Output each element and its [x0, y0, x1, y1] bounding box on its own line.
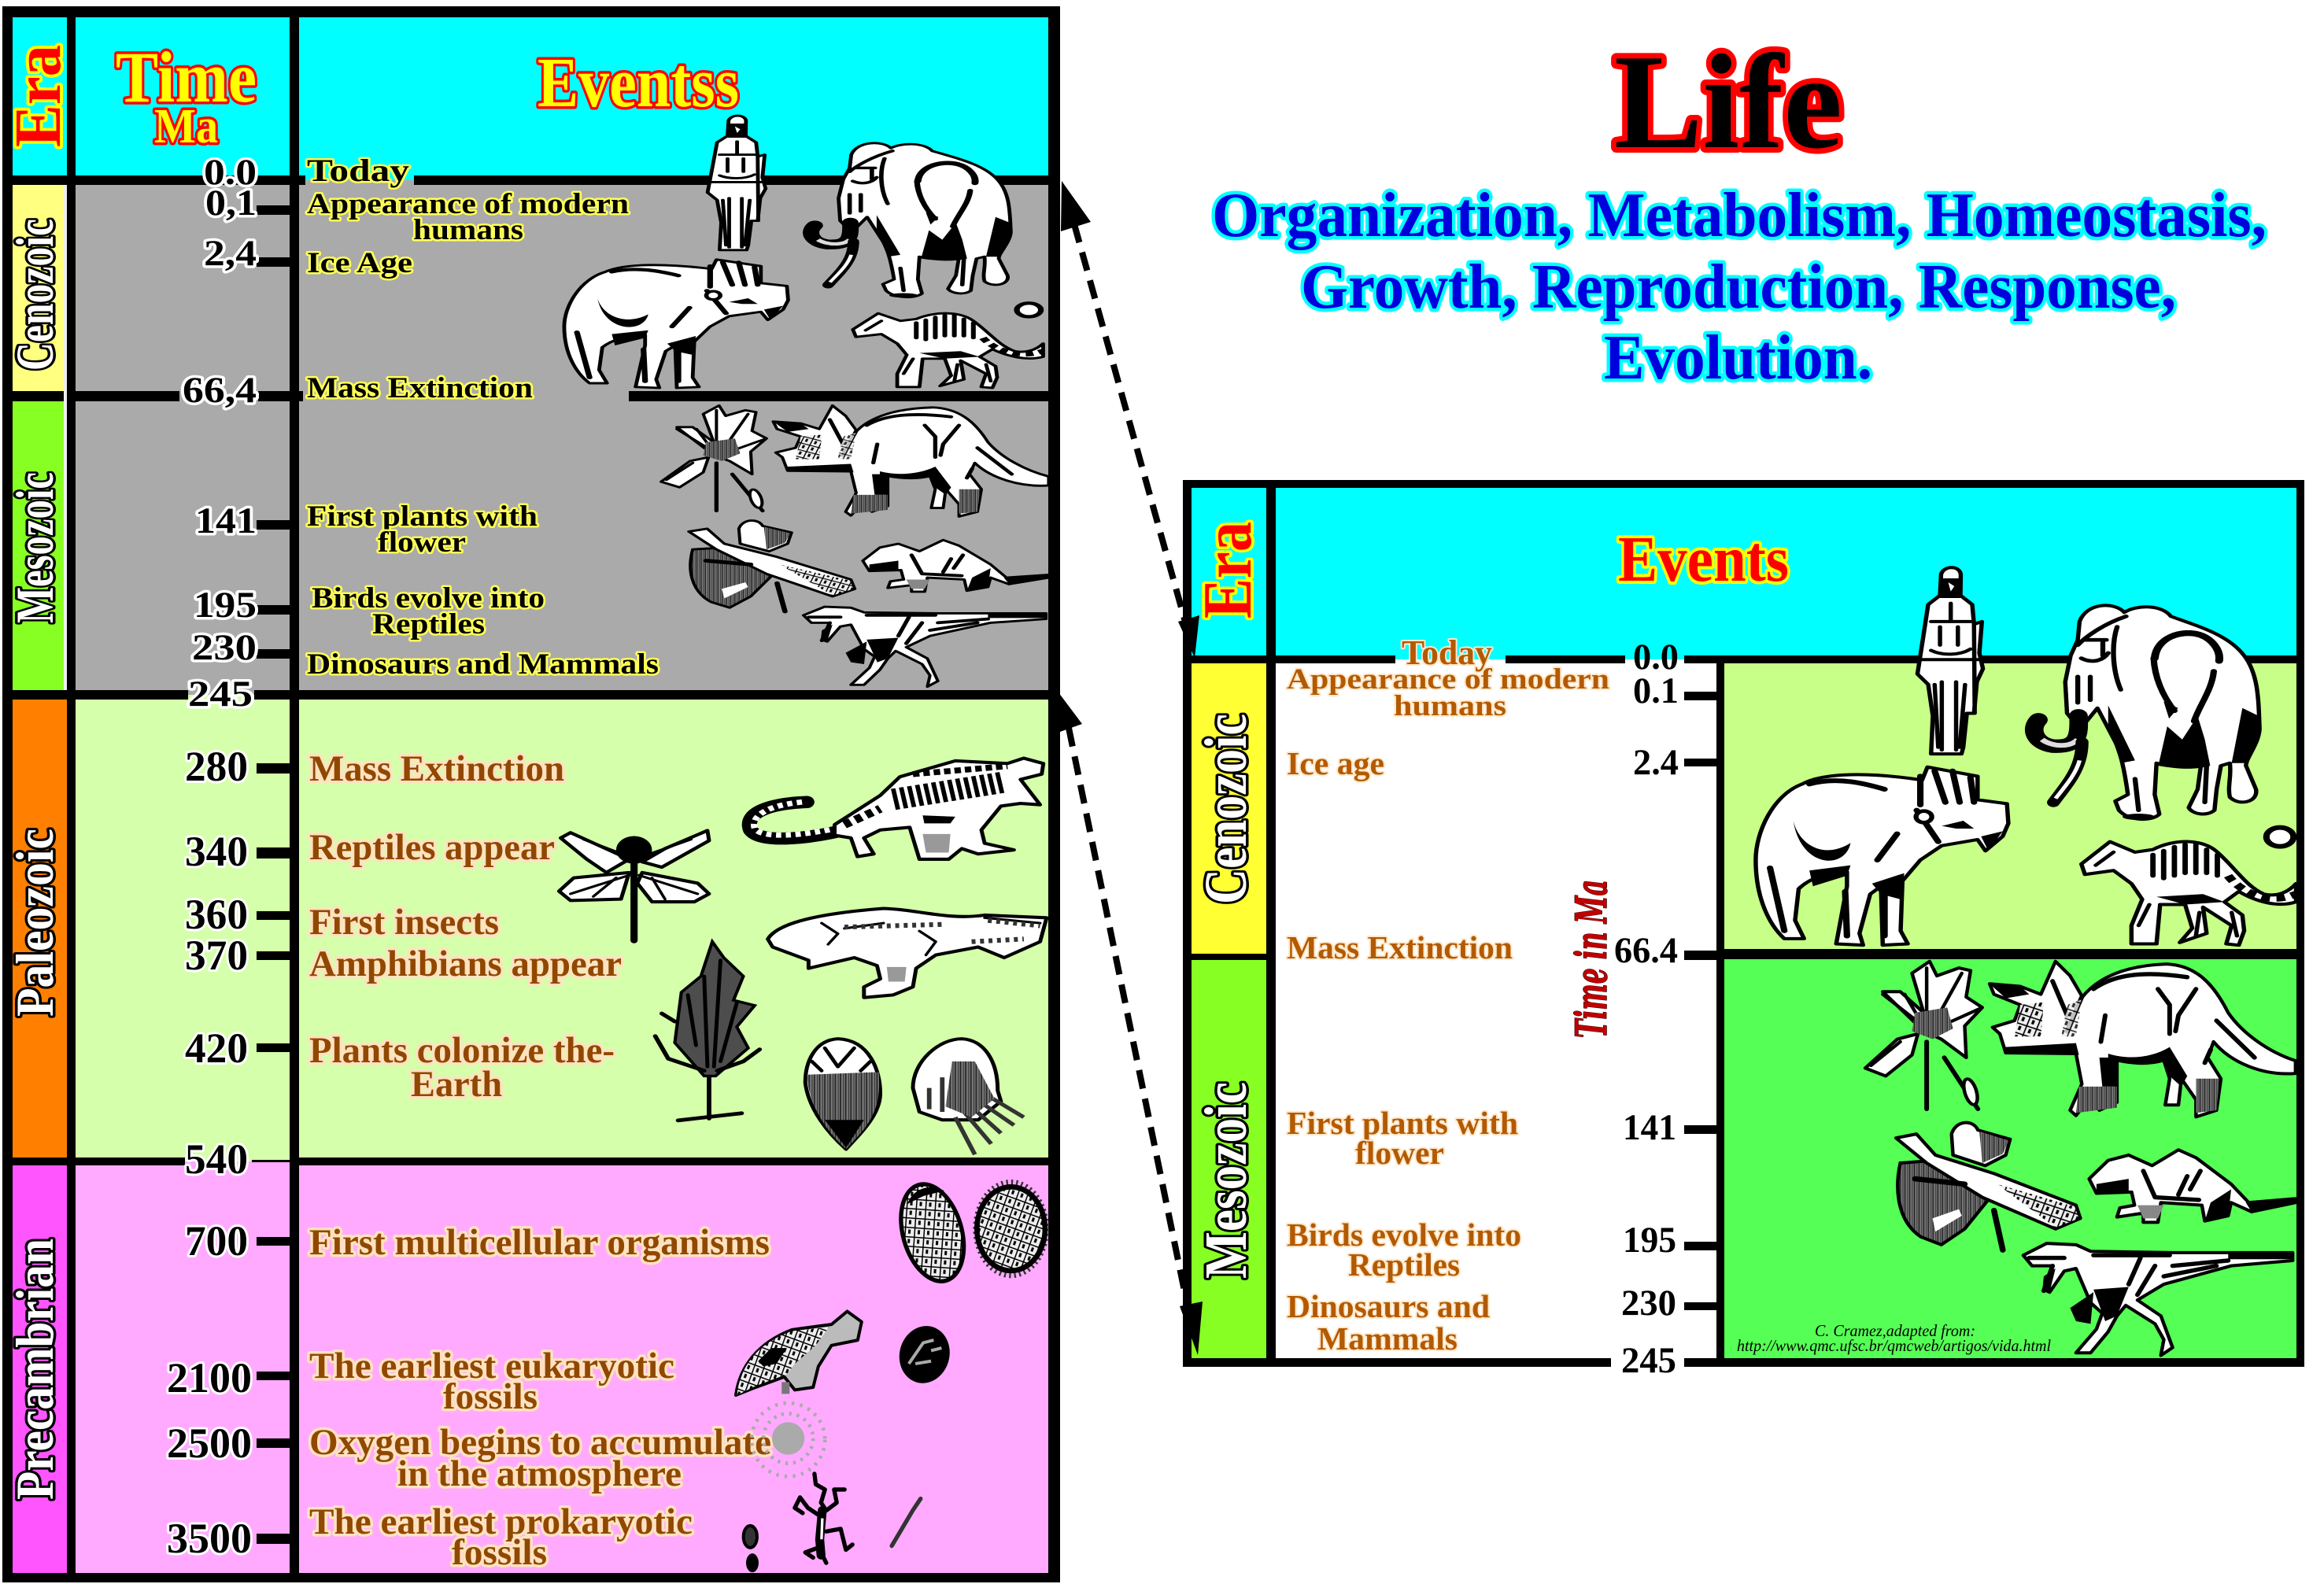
events text: Paleozoic: [309, 748, 622, 1105]
time column header: [76, 17, 290, 175]
time scale numbers: 230: [1621, 1283, 1676, 1324]
time scale numbers: 0,1: [205, 183, 257, 223]
icon: spiny round organism: [976, 1182, 1047, 1276]
events text: Precambrian: The earliest eukaryotic: [309, 1346, 674, 1386]
icon: archaeopteryx: [1896, 1123, 2080, 1250]
events text: Today: [1402, 633, 1492, 672]
Cenozoic events band: [299, 185, 1048, 391]
time scale numbers: 360: [185, 891, 248, 938]
label: Cenozoic: Cenozoic: [5, 219, 65, 371]
Precambrian era cell: [13, 1165, 67, 1573]
events text: [1287, 633, 1609, 1357]
events text: Cenozoic and Mesozoic: Today: [307, 153, 409, 188]
icon: archaeopteryx: [689, 521, 855, 611]
time scale numbers: 700: [185, 1217, 248, 1265]
animals: Cenozoic: [1756, 567, 2296, 945]
time scale numbers: 245: [1621, 1340, 1676, 1381]
icon: triceratops: [1990, 962, 2296, 1117]
time scale numbers: 0.0: [204, 152, 257, 193]
events text: Precambrian: The earliest prokaryotic: [309, 1501, 693, 1542]
time ticks: [257, 205, 290, 1544]
label: Precambrian: Precambrian: [5, 1239, 65, 1500]
time scale numbers: 141: [1623, 1107, 1676, 1148]
events text: Precambrian: fossils: [443, 1376, 538, 1417]
icon: oxygen dot cloud: [752, 1403, 825, 1476]
icon: flowering plant: [661, 405, 767, 511]
time scale numbers: 370: [185, 932, 248, 979]
time scale numbers: 245: [188, 674, 253, 714]
time scale numbers: 3500: [167, 1515, 252, 1562]
time scale numbers: 280: [185, 743, 248, 790]
time scale numbers: 420: [185, 1025, 248, 1072]
Mesozoic illustration band: [1724, 959, 2296, 1358]
icon: small mammal: [2089, 1150, 2296, 1222]
events text: Paleozoic: First insects: [309, 902, 499, 943]
animals: Mesozoic: [1865, 962, 2296, 1356]
icon: mammoth: [811, 143, 1011, 297]
time scale numbers: 66,4: [183, 370, 257, 411]
events text: Birds evolve into: [1287, 1217, 1521, 1253]
source credit: C. Cramez,adapted from:: [1815, 1321, 1975, 1340]
events text: Dinosaurs and: [1287, 1288, 1490, 1324]
events text: humans: [1394, 690, 1506, 722]
events text: First plants with: [1287, 1105, 1518, 1141]
era column header: [13, 17, 67, 175]
events text: Precambrian: fossils: [452, 1532, 547, 1573]
animals: Cenozoic: [564, 116, 1043, 388]
source credit: http://www.qmc.ufsc.br/qmcweb/artigos/vida.html: [1737, 1336, 2051, 1355]
Paleozoic time band: [76, 700, 290, 1158]
events text: Reptiles: [1348, 1246, 1460, 1283]
events text: Appearance of modern: [1287, 663, 1609, 696]
Cenozoic time band: [76, 185, 290, 391]
icon: mammoth: [2034, 605, 2259, 820]
events header: [1276, 488, 2296, 655]
icon: plant tree: [656, 942, 759, 1121]
label: Era: Era: [2, 45, 75, 147]
events text: Cenozoic and Mesozoic: Reptiles: [372, 608, 485, 641]
events text: Cenozoic and Mesozoic: First plants with: [307, 500, 538, 533]
panel: Cenozoic and Mesozoic detail: [1183, 480, 2304, 1381]
events text: Mass Extinction: [1287, 929, 1513, 966]
Mesozoic era cell: [1192, 960, 1266, 1358]
events text: Paleozoic: Earth: [411, 1064, 502, 1105]
events text: Precambrian: in the atmosphere: [397, 1453, 682, 1494]
icon: small mammal: [863, 540, 1048, 592]
source credit: [1737, 1321, 2051, 1355]
time scale numbers: 141: [195, 500, 257, 541]
events text: flower: [1355, 1135, 1444, 1171]
time scale numbers: 2,4: [204, 233, 257, 274]
events text: Mammals: [1317, 1320, 1458, 1357]
Mesozoic era cell: [13, 401, 64, 690]
Mesozoic events band: [299, 401, 1048, 690]
time scale numbers: 2500: [167, 1420, 252, 1467]
icon: striped mammal: [853, 303, 1043, 388]
events column header: [299, 17, 1048, 175]
era labels: [2, 45, 75, 1500]
icon: small coccus pair: [744, 1526, 759, 1572]
title: Life: Life: [1614, 28, 1842, 177]
events text: Cenozoic and Mesozoic: flower: [378, 526, 466, 559]
subtitle: characteristics of life: [1212, 181, 2267, 393]
time ticks: [1684, 655, 1716, 1310]
icon: dark round cell: [893, 1320, 956, 1389]
time scale numbers: 340: [185, 828, 248, 875]
icon: human: [1917, 567, 1985, 754]
events text: Paleozoic: Plants colonize the-: [309, 1030, 615, 1071]
subtitle: characteristics of life: Organization, Metabolism, Homeostasis,: [1212, 181, 2267, 250]
label: Cenozoic: Cenozoic: [1193, 714, 1259, 904]
subtitle: characteristics of life: Growth, Reproduction, Response,: [1301, 253, 2176, 322]
icon: horned mammal: [564, 260, 788, 388]
time scale numbers: 2100: [167, 1354, 252, 1401]
icon: jellyfish: [913, 1039, 1024, 1154]
icon: raptor: [804, 607, 1046, 687]
icon: flowering plant: [1865, 962, 1982, 1109]
events text: Cenozoic and Mesozoic: Dinosaurs and Mammals: [307, 648, 659, 681]
icon: human: [708, 116, 767, 250]
icon: raptor: [2023, 1243, 2293, 1356]
icon: striped mammal: [2082, 828, 2296, 945]
icon: triceratops: [773, 405, 1048, 516]
Precambrian events band: [299, 1165, 1048, 1573]
heading: Time Ma: Ma: [154, 100, 218, 153]
events white column: [1276, 663, 1716, 1358]
heading: Time Ma: Time: [116, 37, 257, 117]
organisms: Precambrian: [736, 1176, 1047, 1572]
events text: Cenozoic and Mesozoic: [307, 153, 659, 681]
events text: Cenozoic and Mesozoic: Appearance of modern: [307, 188, 629, 220]
era header: [1192, 488, 1266, 655]
label: Mesozoic: Mesozoic: [5, 472, 65, 623]
icon: trilobite: [805, 1039, 881, 1149]
events text: Cenozoic and Mesozoic: humans: [413, 214, 523, 246]
organisms: Paleozoic: [559, 759, 1047, 1154]
time scale numbers: 0.1: [1633, 670, 1679, 711]
animals: Mesozoic: [661, 405, 1048, 687]
Cenozoic era cell: [1192, 663, 1266, 954]
events text: Precambrian: Oxygen begins to accumulate: [309, 1422, 771, 1463]
events text: Paleozoic: Mass Extinction: [309, 748, 564, 789]
icon: oval multicellular organism: [890, 1176, 974, 1289]
events text: Paleozoic: Reptiles appear: [309, 827, 555, 868]
time scale numbers: [1614, 637, 1679, 1381]
time scale numbers: 540: [185, 1135, 248, 1183]
Paleozoic era cell: [13, 700, 67, 1158]
time scale numbers: 195: [1623, 1220, 1676, 1261]
heading: Events: Events: [1618, 522, 1789, 595]
Paleozoic events band: [299, 700, 1048, 1158]
time scale numbers: 195: [194, 585, 257, 626]
events text: Cenozoic and Mesozoic: Mass Extinction: [307, 372, 533, 404]
events text: Cenozoic and Mesozoic: Birds evolve into: [312, 582, 545, 615]
events text: Paleozoic: Amphibians appear: [309, 943, 622, 984]
icon: amphibian: [768, 908, 1047, 998]
icon: dragonfly: [559, 830, 709, 940]
arrow: Cenozoic link between panels: [1061, 181, 1199, 658]
label: Mesozoic: Mesozoic: [1193, 1082, 1259, 1279]
label: Paleozoic: Paleozoic: [5, 829, 65, 1017]
icon: prokaryote filament: [795, 1474, 852, 1563]
heading: Era: Era: [1190, 522, 1266, 618]
heading: Eventss: Eventss: [538, 44, 739, 122]
Mesozoic time band: [76, 401, 290, 690]
events text: Cenozoic and Mesozoic: Ice Age: [307, 247, 412, 279]
time scale numbers: 2.4: [1633, 742, 1679, 783]
time scale numbers: 0.0: [1633, 637, 1679, 678]
Cenozoic illustration band: [1724, 663, 2296, 949]
events text: Ice age: [1287, 745, 1384, 781]
time scale numbers: 230: [192, 627, 257, 668]
heading: Time Ma: [116, 37, 257, 153]
time scale numbers: 66.4: [1614, 930, 1678, 971]
axis label: Time in Ma: Time in Ma: [1566, 880, 1616, 1038]
icon: horned mammal: [1756, 767, 2008, 945]
icon: eukaryote cell: [736, 1311, 862, 1395]
events text: Precambrian: [309, 1222, 771, 1573]
Precambrian time band: [76, 1165, 290, 1573]
icon: rod bacterium: [892, 1499, 921, 1546]
arrow: Mesozoic link between panels: [1059, 692, 1203, 1355]
Cenozoic era cell: [13, 185, 64, 391]
time scale numbers: [167, 152, 257, 1562]
events text: Precambrian: First multicellular organisms: [309, 1222, 770, 1263]
icon: reptile: [749, 759, 1044, 859]
subtitle: characteristics of life: Evolution.: [1604, 323, 1872, 393]
